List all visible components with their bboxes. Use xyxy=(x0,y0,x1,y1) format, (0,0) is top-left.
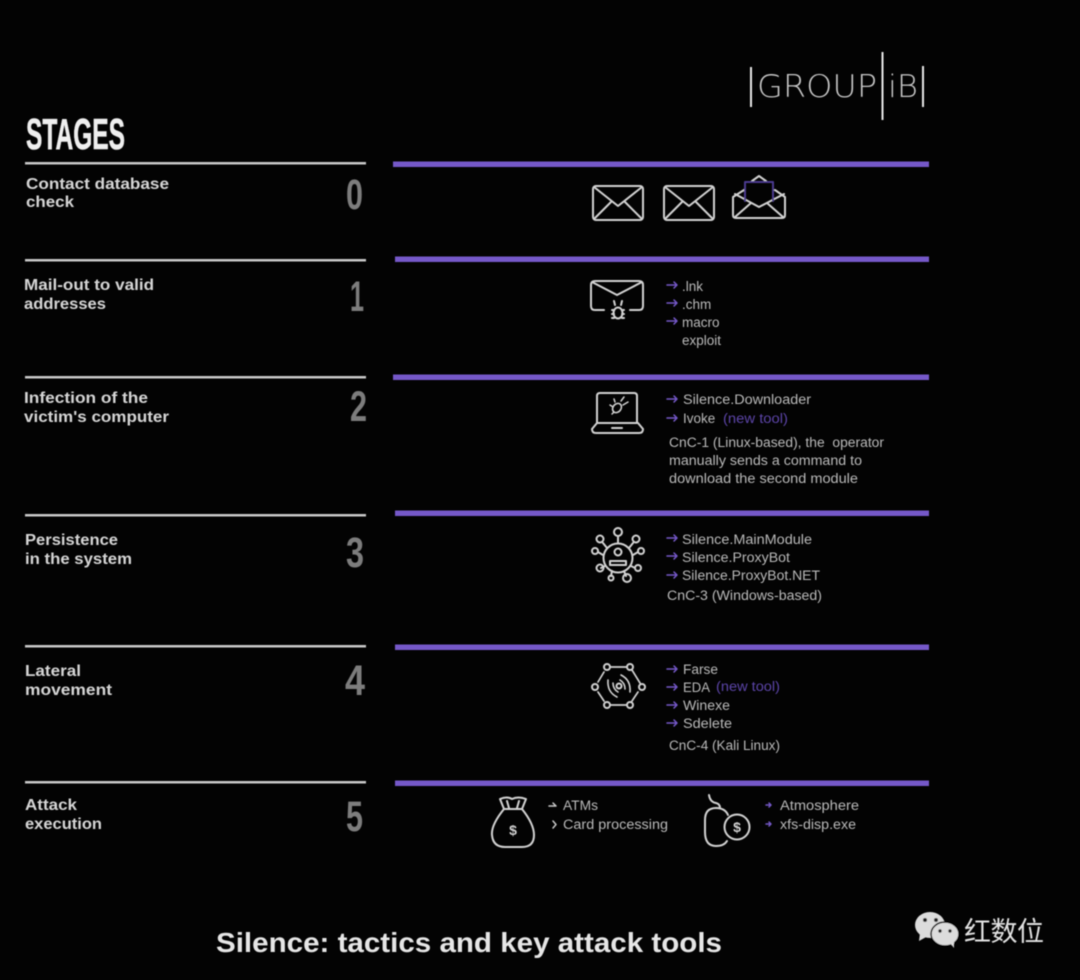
list: lateral tools: CnC-4 (Kali Linux) xyxy=(669,738,780,753)
stage 2: victim's computer xyxy=(24,409,169,426)
list: malware and CnC: download the second module xyxy=(669,471,858,486)
list: lateral tools: Farse xyxy=(683,662,718,677)
stage 3: Persistence xyxy=(25,532,118,549)
list: malware and CnC: Ivoke xyxy=(683,411,715,426)
list: lateral tools: (new tool) xyxy=(716,679,780,694)
stage 4 xyxy=(25,644,929,753)
list: modules: Silence.ProxyBot xyxy=(682,550,790,565)
stage 4: 4 xyxy=(345,657,365,705)
stage 2: Infection of the xyxy=(24,390,148,407)
stage 1: Mail-out to valid xyxy=(24,277,154,294)
list: ATM tools xyxy=(766,798,859,832)
watermark: WeChat account: 红数位 xyxy=(964,917,1044,947)
list: targets: ATMs xyxy=(563,798,598,813)
list: targets xyxy=(549,798,668,832)
list: malware and CnC: manually sends a command to xyxy=(669,453,862,468)
list: modules: Silence.MainModule xyxy=(682,532,812,547)
list: file types: .lnk xyxy=(682,279,703,294)
icon: closed envelope xyxy=(664,186,714,220)
logo: Group-IB: GROUP xyxy=(757,69,877,105)
list: ATM tools: xfs-disp.exe xyxy=(780,817,856,832)
stage 3: 3 xyxy=(346,529,364,577)
stage 0: 0 xyxy=(346,171,363,219)
list: malware and CnC: Silence.Downloader xyxy=(683,392,812,407)
stage 1: 1 xyxy=(350,273,364,321)
heading: stages: STAGES xyxy=(26,110,125,159)
list: file types: exploit xyxy=(682,333,721,348)
stage 2: 2 xyxy=(350,383,367,431)
icon: hexagonal network with signal xyxy=(592,664,645,708)
stage 5: execution xyxy=(25,816,102,833)
watermark: WeChat account xyxy=(915,912,1044,948)
icon: money bag: $ xyxy=(509,822,517,838)
stage 5: Attack xyxy=(25,797,77,814)
icon: mouse with coin: $ xyxy=(733,819,741,835)
stage 0: Contact database xyxy=(26,176,169,193)
list: file types xyxy=(667,279,721,348)
list: malware and CnC xyxy=(667,392,885,486)
stage 3 xyxy=(25,510,929,603)
list: lateral tools xyxy=(667,662,780,753)
icon: closed envelope xyxy=(593,186,643,220)
list: malware and CnC: (new tool) xyxy=(723,411,788,426)
stage 5: 5 xyxy=(346,793,363,841)
logo: Group-IB xyxy=(750,52,924,120)
icon: envelope with bug xyxy=(591,281,643,318)
stage 4: movement xyxy=(25,682,112,699)
stage 3: in the system xyxy=(25,551,132,568)
icon: money bag xyxy=(492,798,534,847)
list: file types: macro xyxy=(682,315,720,330)
logo: Group-IB: iB xyxy=(888,69,918,105)
stage 0 xyxy=(25,162,929,220)
list: modules: Silence.ProxyBot.NET xyxy=(682,568,820,583)
stage 1: addresses xyxy=(24,296,106,313)
icon: mouse with coin xyxy=(705,795,750,846)
stage 4: Lateral xyxy=(25,663,81,680)
icon: open envelope xyxy=(733,176,785,218)
list: lateral tools: Winexe xyxy=(683,698,730,713)
icon: laptop with bug xyxy=(592,393,643,433)
stage 5 xyxy=(25,780,929,847)
list: modules xyxy=(667,532,822,603)
list: lateral tools: Sdelete xyxy=(683,716,732,731)
list: targets: Card processing xyxy=(563,817,668,832)
icon: network with user xyxy=(592,528,644,582)
list: ATM tools: Atmosphere xyxy=(780,798,859,813)
stage 1 xyxy=(24,256,929,348)
stage 2 xyxy=(24,374,929,486)
icon: WeChat bubbles xyxy=(915,912,959,948)
title: Silence: tactics and key attack tools xyxy=(216,927,722,958)
list: file types: .chm xyxy=(682,297,711,312)
stage 0: check xyxy=(26,194,74,211)
list: malware and CnC: CnC-1 (Linux-based), the operator xyxy=(669,435,885,450)
list: modules: CnC-3 (Windows-based) xyxy=(667,588,822,603)
list: lateral tools: EDA xyxy=(683,680,710,695)
